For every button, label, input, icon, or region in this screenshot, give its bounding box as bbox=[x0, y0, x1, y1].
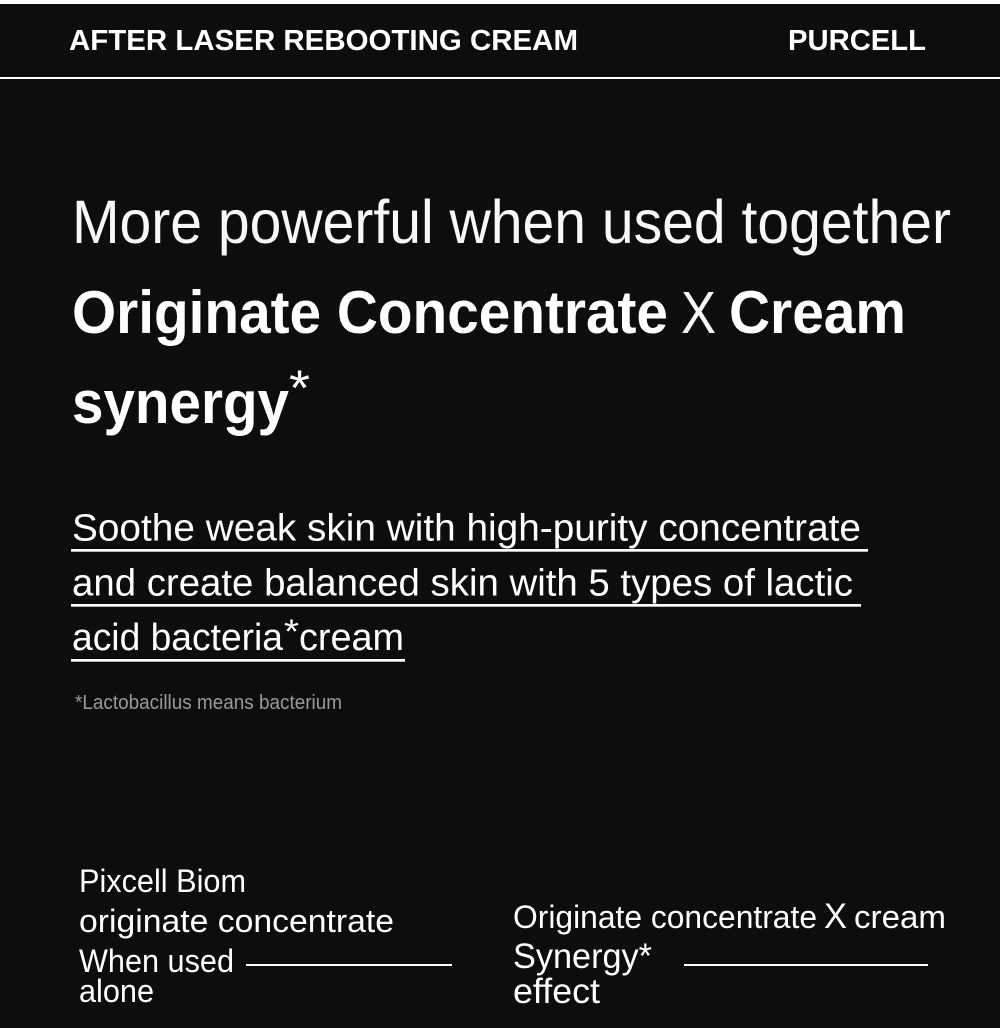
underlined description: * bbox=[284, 613, 299, 651]
header product name: AFTER LASER REBOOTING CREAM bbox=[69, 25, 578, 57]
title: X bbox=[681, 280, 716, 346]
underlined description bbox=[71, 508, 868, 662]
legend: synergy effect: cream bbox=[854, 899, 946, 935]
title: Originate Concentrate bbox=[72, 279, 668, 346]
legend: synergy effect: Originate concentrate bbox=[513, 899, 817, 935]
legend: concentrate alone: When used bbox=[79, 943, 234, 979]
underlined description: Soothe weak skin with high-purity concentrate bbox=[72, 508, 861, 550]
legend: synergy effect: X bbox=[824, 897, 847, 936]
legend: concentrate alone bbox=[79, 863, 452, 1009]
title: * bbox=[289, 360, 310, 416]
header brand name: PURCELL bbox=[788, 25, 926, 57]
legend: synergy effect bbox=[513, 897, 946, 1011]
legend: concentrate alone: alone bbox=[79, 973, 154, 1009]
title: synergy bbox=[72, 369, 290, 436]
header bar bbox=[0, 25, 1000, 79]
legend: concentrate alone: originate concentrate bbox=[79, 903, 394, 939]
underlined description: and create balanced skin with 5 types of lactic bbox=[72, 562, 853, 604]
legend: synergy effect: Synergy* bbox=[513, 937, 652, 976]
underlined description: acid bacteria bbox=[72, 617, 284, 659]
legend: synergy effect: effect bbox=[513, 972, 600, 1011]
footnote: *Lactobacillus means bacterium bbox=[75, 692, 342, 714]
underlined description: cream bbox=[299, 617, 404, 659]
title: Cream bbox=[729, 279, 906, 346]
legend: concentrate alone: Pixcell Biom bbox=[79, 863, 246, 899]
title bbox=[72, 188, 951, 436]
title: More powerful when used together bbox=[72, 188, 951, 256]
